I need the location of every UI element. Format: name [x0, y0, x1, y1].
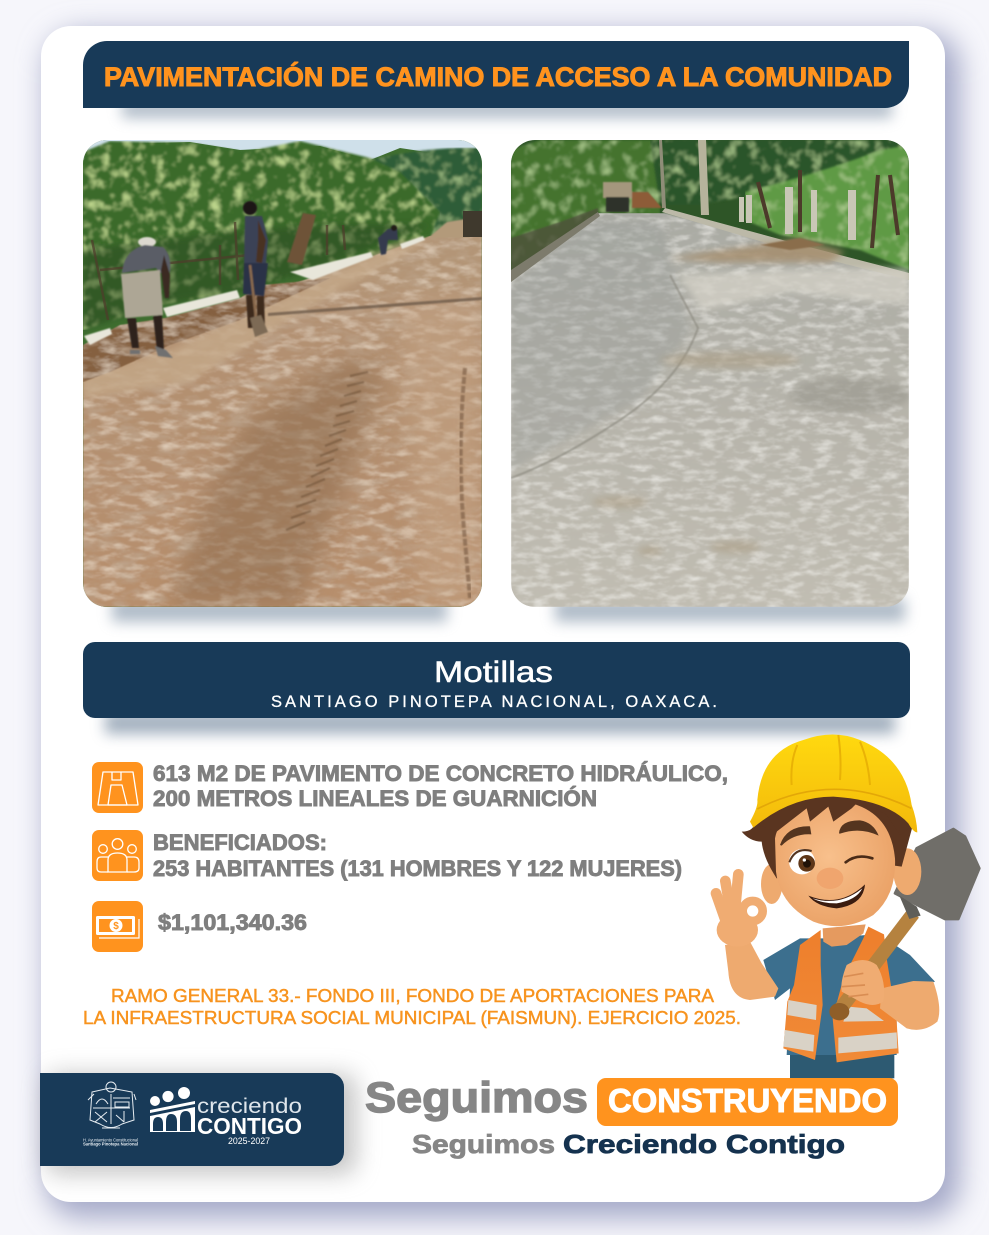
- slogan: Seguimos: Seguimos: [365, 1074, 588, 1122]
- text: beneficiaries: 253 HABITANTES (131 HOMBRES Y 122 MUJERES): [153, 856, 682, 881]
- hillside: [370, 148, 482, 238]
- slogan: Seguimos Creciendo Contigo: Seguimos: [412, 1129, 555, 1159]
- right track: [461, 368, 470, 598]
- shovel handle: [838, 913, 913, 1012]
- logo wordmark: CONTIGO: [197, 1113, 302, 1139]
- darker left lane: [511, 222, 690, 470]
- shadow line: [268, 297, 482, 316]
- icon: money: $: [113, 921, 119, 932]
- road surface: [83, 236, 482, 607]
- shovel blade: [895, 829, 979, 919]
- concrete joints: [511, 275, 698, 478]
- shirt: [763, 935, 935, 1055]
- tyre tracks: [286, 372, 368, 530]
- location banner: [83, 642, 910, 734]
- open eye: [789, 849, 815, 874]
- palm: [717, 913, 758, 947]
- shaded fence zone: [83, 225, 430, 330]
- text: beneficiaries: BENEFICIADOS:: [153, 830, 327, 855]
- left arm: [725, 942, 778, 1000]
- dark central band: [170, 360, 385, 607]
- road surface: [511, 213, 909, 607]
- dirt mounds: [83, 278, 330, 382]
- text: investment amount: $1,101,340.36: [158, 910, 307, 935]
- wooden fence stakes: [758, 170, 898, 248]
- curb segments: [84, 236, 425, 345]
- foliage: [83, 141, 440, 330]
- seal caption: H. Ayuntamiento Constitucional: [83, 1138, 138, 1142]
- safety vest: [783, 927, 899, 1062]
- text: beneficiaries: [153, 830, 682, 881]
- text: funding source: RAMO GENERAL 33.- FONDO III, FONDO DE APORTACIONES PARA: [111, 986, 714, 1006]
- hair back: [742, 790, 913, 878]
- worker two: [243, 201, 268, 337]
- text: pavement: 200 METROS LINEALES DE GUARNICIÓN: [153, 786, 597, 811]
- hair fringe: [758, 794, 913, 835]
- curb: [662, 208, 909, 280]
- stained patches: [592, 352, 800, 556]
- utility pole: [698, 140, 709, 215]
- light right lane: [408, 304, 482, 607]
- hard hat: [750, 734, 917, 832]
- municipal logo bar: [40, 1073, 356, 1174]
- hat brim line: [757, 789, 911, 809]
- mound and machine: [428, 219, 470, 238]
- sky: [83, 140, 482, 160]
- icon: money: [92, 901, 143, 952]
- fence at left of road: [511, 208, 598, 272]
- logo wordmark: 2025-2027: [228, 1136, 270, 1146]
- green hillside: [745, 145, 909, 270]
- OK hand: [716, 874, 763, 922]
- logo mark: [150, 1087, 195, 1132]
- worker three: [378, 225, 398, 255]
- neck: [823, 924, 866, 947]
- municipal seal: [88, 1082, 136, 1128]
- logo wordmark: [197, 1095, 302, 1146]
- slogan: CONSTRUYENDO badge: CONSTRUYENDO: [608, 1082, 887, 1119]
- text: funding source: [83, 986, 741, 1028]
- background trees: [650, 140, 909, 205]
- dump truck: [603, 182, 662, 212]
- tree stump: [287, 213, 316, 265]
- text: pavement: [153, 761, 728, 811]
- icon: people: [92, 830, 143, 881]
- icon: road: [92, 762, 143, 813]
- location banner: Motillas: [434, 656, 553, 689]
- photo shadows: [112, 598, 905, 622]
- tree line: [511, 140, 660, 272]
- ears: [761, 848, 921, 904]
- slogan: Seguimos Creciendo Contigo: Creciendo Contigo: [563, 1129, 845, 1159]
- fence posts: [92, 222, 345, 320]
- lighter slab: [678, 268, 909, 310]
- trousers: [790, 1053, 894, 1078]
- gripping hand: [841, 960, 884, 1005]
- photo: finished concrete road: [511, 140, 910, 607]
- dirt patch: [668, 238, 845, 262]
- text: pavement: 613 M2 DE PAVIMENTO DE CONCRETO HIDRÁULICO,: [153, 761, 728, 786]
- mouth: [808, 884, 865, 908]
- finger lines: [842, 973, 868, 997]
- location banner: SANTIAGO PINOTEPA NACIONAL, OAXACA.: [271, 693, 717, 711]
- winking eye: [846, 857, 872, 862]
- character: construction worker mascot: [716, 734, 979, 1078]
- worker one: [121, 237, 173, 358]
- photo: workers on dirt road: [83, 140, 482, 607]
- face: [775, 800, 895, 926]
- text: funding source: LA INFRAESTRUCTURA SOCIAL MUNICIPAL (FAISMUN). EJERCICIO 2025.: [83, 1008, 741, 1028]
- seal caption: [83, 1138, 138, 1146]
- forearm: [880, 981, 939, 1030]
- fence posts: [739, 187, 856, 240]
- eyebrows: [780, 820, 879, 846]
- title banner: [83, 41, 909, 118]
- light side band: [83, 240, 430, 398]
- title banner: PAVIMENTACIÓN DE CAMINO DE ACCESO A LA COMUNIDAD: [104, 61, 892, 92]
- hat ridges: [791, 735, 870, 785]
- nose: [817, 868, 843, 889]
- seal caption: Santiago Pinotepa Nacional: [83, 1142, 138, 1146]
- logo wordmark: creciendo: [197, 1095, 302, 1118]
- slogan: Seguimos Creciendo Contigo: [412, 1129, 845, 1159]
